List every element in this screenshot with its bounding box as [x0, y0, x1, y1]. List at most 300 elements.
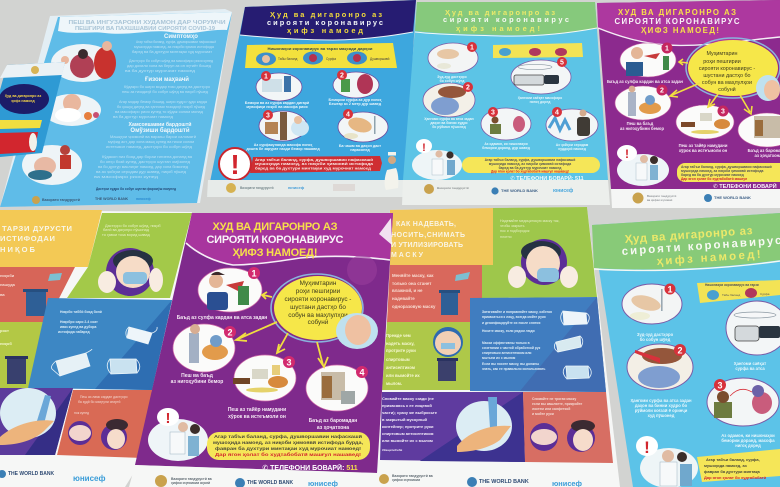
- footer: [207, 180, 404, 197]
- step 3: [233, 355, 296, 401]
- yellow symptoms band: Табы баланд: [278, 57, 297, 61]
- step 3: [676, 105, 734, 139]
- step 3: 3: [717, 380, 723, 390]
- red warning bar: мушоҳида намоед, аз ниқоби ҳимоявӣ истифода: [255, 162, 374, 166]
- captions: даҳон ва бинии худро: [430, 121, 468, 125]
- captions: [607, 79, 780, 158]
- panel: red washing: пок кунед: [74, 411, 89, 415]
- captions: [630, 332, 775, 448]
- icon: person fitting mask: [508, 239, 578, 288]
- illustration: doctor and patient: [148, 408, 208, 461]
- step 3: [707, 378, 779, 426]
- captions: Баъд аз сулфа кардан ва атса задан: [607, 79, 683, 84]
- panel: green wearing mask: Дастҳоро бо собун шӯед, ниқоб: [105, 224, 161, 228]
- illustration: baby feeding: [43, 94, 101, 126]
- leaflet title oval: Ҳуд ва дигаронро аз: [5, 94, 41, 98]
- captions row 2: Аз сурфакунанда масофа нигоҳ: [254, 143, 313, 147]
- poster: purple prevention, bottom centre-left: [129, 213, 393, 487]
- captions: худдорӣ намоед: [558, 147, 587, 151]
- footer logos: ва ҳифзи иҷтимоӣ: [647, 198, 673, 202]
- panel: blue mask instructions: Носите маску, если рядом люди: [482, 329, 535, 333]
- body text: бо онҳо бозӣ кунед, дастҳоро шустан омӯзонед: [100, 160, 191, 164]
- footer: [611, 189, 780, 208]
- panel: yellow title: КАК НАДЕВАТЬ,: [396, 221, 456, 228]
- section headings: Симптомҳо: [164, 34, 198, 40]
- captions: сурфа ва атса: [735, 366, 765, 371]
- panel: red washing: локтем или салфеткой: [532, 407, 570, 411]
- panel: purple sanitising hands: спиртовым антисептиком: [382, 431, 433, 436]
- body text: ва аз ҷойҳои серодам дур шавед, ниқоб пӯшед: [96, 170, 187, 174]
- panel: purple sanitising hands: в закрытый мусорный: [382, 417, 428, 422]
- footer logos: Вазорати тандурустӣ ва: [392, 474, 433, 478]
- step 1: [198, 267, 262, 312]
- yellow advisory pill: [462, 157, 600, 174]
- panel: red washing: Пеш аз ламс кардан дастҳоро: [80, 395, 128, 399]
- footer: [129, 465, 377, 487]
- icon: exclamation: !: [230, 149, 240, 180]
- poster: mask guidance, bottom left: [0, 210, 192, 487]
- yellow advisory pill: Агар табъи баланд, сурфа, душворшавии нафаскашӣ: [485, 158, 575, 162]
- section headings: [128, 34, 198, 134]
- panel: purple sanitising hands: [0, 388, 73, 455]
- step 2: [173, 324, 236, 372]
- panel: red disposal: ниқоби: [0, 273, 15, 278]
- body text: дар дохили хона ва берун аз он эҳтиёт бошед: [127, 64, 212, 68]
- step 1: 1: [251, 268, 257, 278]
- panel: lime disposal: мылом.: [386, 381, 402, 386]
- captions row 2: [246, 143, 381, 152]
- yellow symptoms band: Нишонаҳои коронавирус ва тарзи мақсади дарҳои: [268, 47, 373, 51]
- panel: green wearing mask: чтобы закрыть: [500, 224, 525, 228]
- yellow advisory band: Дар ягон ҳолат бо худтабобатӣ: [704, 475, 767, 480]
- captions: худ пӯшонед: [648, 413, 675, 418]
- figure: man in white robe: [385, 152, 398, 190]
- illustration: doctor and patient: [636, 436, 698, 487]
- panel: red disposal: нашуда: [0, 282, 16, 287]
- yellow advisory pill: мушоҳида намоед, аз ниқоби ҳимоявӣ истифода: [489, 162, 571, 166]
- yellow centre message: собун ва маҳлулҳои: [288, 311, 348, 319]
- step 1: [256, 71, 302, 101]
- footer logos: юнисеф: [288, 185, 305, 190]
- step 2: 2: [677, 346, 683, 356]
- captions: Аз одамон, ки нишонаҳои: [721, 433, 775, 438]
- step 2: [615, 84, 671, 120]
- panel: purple sanitising hands: #ЗащитиСебя: [382, 448, 403, 452]
- illustration: family doing exercise: [22, 145, 82, 185]
- panel: purple sanitising hands: части); сразу же выбросьте: [382, 410, 438, 415]
- captions: Аз одамон, ки нишонаҳои: [484, 142, 528, 146]
- panel: red washing: если вы кашляете, прикройте: [532, 402, 582, 406]
- yellow centre message: Муҳимтарин: [300, 280, 337, 287]
- captions: бемории доранд, масофа: [721, 438, 775, 443]
- panel: lime disposal: протрите руки: [386, 348, 416, 353]
- footer logos: THE WORLD BANK: [95, 197, 129, 201]
- footer logos: Вазорати тандурустӣ ва: [171, 477, 212, 481]
- panel: lime disposal: Прежде чем: [386, 333, 411, 338]
- panel: red disposal: одноразовую маску: [392, 304, 436, 309]
- icon: surgical mask 1: [561, 311, 589, 325]
- title: сирояти коронавирус: [267, 18, 383, 27]
- captions row 1: мувофиқи ниқоб ва масофа риоя: [246, 105, 308, 109]
- step 4: 4: [359, 368, 365, 378]
- panel: yellow title: ТАРЗИ ДУРУСТИ: [2, 224, 72, 233]
- panel: red disposal: [0, 267, 75, 322]
- illustration: doctor and patient: !: [166, 410, 170, 427]
- panel: lime disposal: или вымойте их: [386, 373, 420, 378]
- step 1: [622, 284, 682, 324]
- panel: blue mask instructions: Затягивайте и поправляйте маску, избегая: [482, 310, 552, 314]
- captions row 2: Ба чашм ва даҳон даст: [339, 144, 381, 148]
- panel: blue mask instructions: Если вы носите маску, вы должны: [482, 362, 539, 366]
- red warning bar: Агар табъи баланд, сурфа, душворшавии нафаскашӣ: [255, 158, 373, 162]
- footer logos: ҳифзи иҷтимоии аҳолӣ: [171, 481, 210, 485]
- body text: Кӯдакро бо шири модар ғизо диҳед ва дастҳоро: [124, 85, 210, 89]
- step 4: [738, 113, 780, 147]
- title: Ҳуд ва дигаронро аз: [624, 225, 753, 246]
- footer logos: [632, 192, 751, 204]
- step 2: 2: [466, 84, 470, 92]
- yellow advisory pill: баред ва ба духтур мурочиат намоед: [681, 173, 745, 177]
- poster: green header and blue body, bottom right: [592, 213, 780, 487]
- poster heading: [68, 20, 226, 32]
- title: ҲИФЗ НАМОЕД!: [232, 247, 318, 259]
- step 5: 5: [560, 60, 564, 66]
- footer: [402, 180, 610, 205]
- panel: purple sanitising hands: Снимайте маску сзади (не: [382, 396, 435, 401]
- arrows: [236, 292, 328, 367]
- panel: red disposal: надевайте: [392, 296, 415, 301]
- title: ХУД ВА ДИГАРОНРО АЗ: [618, 8, 736, 17]
- caption step 4: Баъд аз баромадан: [309, 417, 357, 424]
- step 2: 2: [227, 328, 233, 338]
- header banner: [240, 0, 416, 40]
- icon: person fitting mask: [98, 248, 163, 296]
- footer logos: Вазорати тандурустӣ: [437, 186, 469, 190]
- panel: lime disposal: [0, 322, 47, 388]
- yellow centre message: сирояти коронавирус -: [285, 296, 351, 303]
- footer logos: [0, 470, 105, 483]
- icon: surgical mask 1: [126, 327, 157, 344]
- captions: нигоҳ доред: [530, 100, 551, 104]
- panel: yellow title: ИСТИФОДАИ: [0, 234, 55, 243]
- body text: Агар табъи баланд, сурфа, душворшавии нафаскашӣ: [136, 40, 216, 44]
- captions: аз нигоҳубини бемор: [620, 126, 664, 131]
- step 3: [259, 110, 309, 141]
- captions: Пеш аз тайёр намудани: [679, 143, 728, 148]
- panel: blue mask instructions: спиртовым антисептиком или: [482, 351, 531, 355]
- panel: red disposal: влажной, и не: [392, 288, 423, 293]
- captions: Ҳангоми саёҳат: [734, 361, 766, 366]
- section headings: Омўзиши бардоштӣ: [130, 127, 190, 134]
- step 4: [306, 365, 368, 411]
- yellow advisory pill: [677, 163, 780, 182]
- panel: blue mask instructions: и дезинфицируйте их после снятия: [482, 321, 540, 325]
- yellow centre message: роҳи пешгирии: [296, 288, 341, 295]
- yellow advisory band: Агар табъи баланд, сурфа,: [706, 457, 760, 462]
- captions: Аз ҷойҳои серодам: [556, 143, 589, 147]
- header: [597, 0, 780, 44]
- step 5: [511, 57, 571, 94]
- yellow advisory pill: баред ва ба духтур мурочиат намоед: [499, 166, 562, 170]
- caption step 4: аз ҳоҷатхона: [317, 425, 349, 431]
- captions: нигоҳ доред: [735, 443, 761, 448]
- captions row 1: Бемори ва аз сурфа кардан дигарӣ: [245, 101, 310, 105]
- captions: бо собун шӯед: [440, 79, 465, 83]
- yellow centre message: собунӣ: [308, 318, 329, 326]
- captions row 2: нарасонед: [350, 148, 370, 152]
- poster: mask guidance in Russian, bottom centre: [375, 207, 620, 487]
- captions: Ҳангоми саёҳат масофаро: [518, 96, 562, 100]
- panel: yellow title: МАСКУ: [391, 252, 424, 259]
- poster heading: ПЕШ ВА ИНГУЗАРОНИ ХУДАМОН ДАР ЧОРУМЧИ: [68, 20, 226, 26]
- panel: red washing: и мойте руки: [532, 412, 554, 416]
- footer logos: Вазорати тандурустӣ: [240, 186, 274, 190]
- panel: red disposal: Меняйте маску, как: [392, 273, 434, 278]
- yellow centre message: роҳи пешгирии: [703, 59, 741, 65]
- panel: green wearing mask: [67, 213, 192, 298]
- yellow centre message: Муҳимтарин: [706, 51, 738, 57]
- header: [592, 213, 780, 269]
- panel: blue mask instructions: прикасаться к лицу, всегда мойте руки: [482, 315, 546, 319]
- poster: prevention tips, blue text sheet top left: [0, 9, 232, 207]
- panel: red washing: Снимайте не трогая маску: [532, 397, 576, 401]
- yellow centre message: шустани дастҳо бо: [703, 73, 751, 79]
- panel: lime disposal: ниқоб: [0, 341, 12, 346]
- panel: red washing: [57, 390, 152, 458]
- yellow advisory pill: Дар ягон ҳолат бо худтабобатӣ машғул нашавед!: [215, 452, 362, 457]
- body text: ва масофаро риоя кунед: [94, 175, 159, 179]
- footer logos: [155, 475, 339, 487]
- step 2: 2: [660, 88, 664, 94]
- title: Ҳуд ва дигаронро аз: [270, 10, 382, 19]
- step 3: [481, 107, 531, 140]
- panel: blue mask types: Ниқобро сари 2-4 соат: [60, 320, 98, 324]
- step 4: [338, 109, 388, 142]
- panel: green wearing mask: плотно: [500, 235, 512, 239]
- footer logos: [226, 183, 355, 193]
- leaflet: small folded flyer: [0, 62, 65, 157]
- body text: бо қошуқ диҳед ва ҳангоми ғизодиҳӣ ниқоб пӯшед: [117, 105, 206, 109]
- icon: washing hands: [756, 75, 780, 101]
- icon: washing hands: [336, 313, 378, 349]
- illustration: doctor and patient: [412, 139, 462, 180]
- captions row 1: [245, 98, 382, 109]
- step 3: 3: [286, 358, 292, 368]
- title: СИРОЯТИ КОРОНАВИРУС: [614, 17, 740, 26]
- panel: red disposal: [387, 265, 482, 322]
- panel: lime disposal: антисептиком: [386, 365, 415, 370]
- title: [614, 8, 740, 35]
- step 1: [428, 42, 478, 73]
- body text: Агар модар бемор бошад, шири худро ҷудо карда: [119, 100, 207, 104]
- title: ХУД ВА ДИГАРОНРО АЗ: [212, 221, 338, 233]
- captions: бемории доранд, дур шавед: [482, 146, 531, 150]
- panel: purple sanitising hands: или вымойте их с мылом: [382, 438, 433, 443]
- illustration: doctor and patient: !: [644, 438, 650, 457]
- body text: Дастҳоро бо собун шӯед ва масофаро риоя кунед: [129, 59, 214, 63]
- panel: yellow title: [390, 208, 493, 265]
- title: ҳифз намоед!: [656, 249, 761, 268]
- icon: surgical mask 2: [554, 336, 583, 352]
- caption step 4: [309, 417, 357, 431]
- footer logos: THE WORLD BANK: [714, 195, 751, 200]
- body text: пеш аз ғизодиҳӣ бо собун шӯед ва ниқоб пӯшед: [122, 90, 209, 94]
- yellow centre message: собунӣ: [718, 87, 736, 93]
- icon: exclamation: [219, 148, 251, 180]
- yellow centre message: [686, 38, 780, 98]
- title: ҳифз намоед: [287, 26, 363, 35]
- red warning bar: [250, 156, 382, 173]
- panel: lime disposal: надеть маску,: [386, 341, 415, 346]
- captions: [424, 75, 589, 151]
- illustration: family with masks: [51, 41, 116, 82]
- title: СИРОЯТИ КОРОНАВИРУС: [206, 234, 344, 246]
- section headings: Ғизои маҳвачӣ: [145, 77, 189, 83]
- panel: blue mask types: истифода набаред: [58, 330, 91, 334]
- step 4: 4: [555, 110, 559, 116]
- panel: green wearing mask: бинӣ ва даҳонро пӯшонад: [103, 228, 150, 232]
- phone line: ✆ ТЕЛЕФОНИ БОВАРӢ: 511: [262, 464, 358, 472]
- title: Ҳуд ва дигаронро аз: [445, 8, 555, 17]
- header: [186, 213, 393, 265]
- yellow advisory pill: Дар ягон ҳолат бо худтабобатӣ машғул: [681, 177, 747, 181]
- red warning bar: баред ва ба духтури минтақаи худ мурочиат намоед: [255, 166, 372, 170]
- footer logos: юнисеф: [73, 474, 105, 483]
- footer logos: ҳифзи иҷтимоии: [392, 478, 420, 482]
- yellow advisory pill: Дар ягон ҳолат бо худтабобатӣ машғул нашавед!: [491, 170, 569, 174]
- panel: lime disposal: [382, 322, 470, 390]
- step 3: 3: [721, 108, 725, 116]
- yellow symptoms band: [493, 43, 583, 58]
- captions row 1: Бемории сурфа аз дур нигоҳ: [329, 98, 382, 102]
- phone line: ✆ ТЕЛЕФОНИ БОВАРӢ: [713, 183, 777, 190]
- panel: green wearing mask: то ҳавои тоза ворид шавад: [102, 233, 151, 237]
- yellow advisory pill: Агар табъи баланд, сурфа, душворшавии нафаскашӣ: [681, 165, 772, 169]
- footer logos: THE WORLD BANK: [501, 188, 538, 193]
- captions: Зуд-зуд дастҳоро: [437, 75, 467, 79]
- title: сирояти коронавирус: [443, 15, 569, 24]
- body text: ва ба духтур мурочиат намоед: [113, 115, 174, 119]
- yellow advisory pill: [207, 432, 370, 460]
- caption step 2: Пеш ва баъд: [181, 372, 214, 379]
- panel: red disposal: только она станет: [392, 281, 432, 286]
- panel: yellow title: НОСИТЬ,СНИМАТЬ: [391, 232, 465, 239]
- footer logos: [32, 196, 151, 204]
- step 1: 1: [264, 74, 268, 80]
- caption step 2: [171, 372, 223, 385]
- illustration: doctor and patient: !: [625, 147, 629, 161]
- yellow advisory band: [697, 449, 780, 482]
- panel: blue mask instructions: сочетании с частой обработкой рук: [482, 346, 541, 350]
- illustration: doctor and patient: !: [422, 142, 426, 154]
- step 4: [546, 107, 598, 141]
- title: ҲИФЗ НАМОЕД!: [641, 26, 719, 35]
- poster: green header, top right of centre: [402, 2, 610, 205]
- yellow advisory pill: фавран ба духтури минтақаи худ мурочиат намоед!: [215, 446, 362, 451]
- caption step 3: хӯрок ва истеъмоли он: [228, 414, 286, 420]
- panel: yellow title: И УТИЛИЗИРОВАТЬ: [391, 242, 463, 249]
- step 4: 4: [346, 112, 350, 118]
- footer logos: Вазорати тандурустӣ: [42, 198, 80, 202]
- yellow symptoms band: Сурфа: [326, 57, 336, 61]
- illustration: doctor and patient: [617, 145, 669, 186]
- title: [267, 10, 383, 35]
- title: ҳифз намоед!: [456, 24, 540, 33]
- panel: blue mask types: Ниқоби тиббӣ бояд бинӣ: [60, 310, 102, 314]
- step 1: 1: [667, 284, 673, 294]
- captions: рӯймоли коғазӣ ё оринҷи: [635, 408, 688, 413]
- phone line: ✆ ТЕЛЕФОНИ БОВАРӢ: 511: [510, 175, 584, 182]
- caption step 3: [228, 406, 286, 420]
- caption step 1: Баъд аз сулфа кардан ва атса задан: [177, 314, 267, 321]
- body text: ва масофаро риоя кунед то кӯдак солим монад: [115, 110, 204, 114]
- leaflet title oval: [0, 84, 49, 114]
- footer logos: [379, 474, 583, 487]
- yellow symptoms band: Сурфа: [760, 292, 770, 296]
- footer logos: юнисеф: [136, 197, 151, 201]
- panel: blue mask types: [28, 298, 172, 390]
- icon: surgical mask 3: [563, 366, 591, 379]
- poster: purple, top right: [597, 0, 780, 208]
- title: [206, 221, 344, 259]
- footer logos: THE WORLD BANK: [479, 479, 529, 485]
- panel: purple sanitising hands: [380, 392, 525, 462]
- panel: yellow title: НИҚОБ: [0, 245, 36, 254]
- footer logos: THE WORLD BANK: [247, 480, 293, 486]
- poster heading: ПЕШГИРИ ВА ПАХШШАВИИ СИРОЯТИ COVID-19: [75, 26, 215, 32]
- yellow centre message: [271, 274, 363, 342]
- body text: ва бо духтур маслиҳат намоед, дар хона бимонед: [98, 165, 189, 169]
- plane and train circle: [726, 301, 780, 355]
- captions: хӯрок ва истеъмоли он: [679, 148, 728, 153]
- panel: blue mask instructions: мытьем их с мылом: [482, 356, 516, 360]
- footer logos: [424, 184, 574, 195]
- step 2: 2: [340, 72, 344, 80]
- body text: Машқҳои ҷисмонӣ ва варзиш барои саломатӣ: [110, 135, 196, 139]
- title: [443, 8, 569, 33]
- icon: surgical mask 2: [52, 349, 92, 376]
- body text: Кӯдакон низ бояд дар бораи гигиена донанд ва: [102, 155, 192, 159]
- captions row 1: Бештар аз 2 метр дур шавед: [329, 102, 382, 106]
- step 2: [333, 70, 379, 98]
- panel: red disposal: ва: [0, 292, 5, 297]
- icon: surgical mask 3: [107, 359, 140, 374]
- yellow advisory band: фавран ба духтури минтақа: [704, 469, 761, 474]
- body text: баред ва ба духтури минтақаи худ мурочиат: [132, 50, 212, 54]
- panel: blue mask instructions: знать, как ее правильно использовать: [482, 367, 545, 371]
- caption step 2: аз нигоҳубини бемор: [171, 378, 223, 385]
- footer logos: юнисеф: [553, 187, 574, 194]
- panel: yellow title: [0, 210, 102, 267]
- captions: бо рӯймол пӯшонед: [432, 125, 467, 129]
- closing line: Дастҳои худро бо собун шустан фаромӯш накунед: [96, 186, 176, 191]
- captions: Зуд-зуд дастҳоро: [637, 332, 674, 337]
- panel: blue mask instructions: [470, 297, 606, 392]
- captions: Ҳангоми сурфа ва атса задан: [424, 117, 474, 121]
- step 3: 3: [266, 112, 270, 120]
- body text: муфид аст, дар хона машқ кунед ва ғизои солим: [108, 140, 195, 144]
- step 1: 1: [470, 44, 474, 52]
- captions: Ҳангоми сурфа ва атса задан: [630, 398, 692, 403]
- footer logos: THE WORLD BANK: [8, 471, 54, 477]
- panel: green wearing mask: Надевайте медицинскую маску так,: [500, 219, 559, 223]
- yellow centre message: шустани дастҳо бо: [290, 303, 346, 311]
- panel: purple sanitising hands: контейнер; протрите руки: [382, 424, 434, 429]
- poster: navy header top centre: [207, 0, 416, 197]
- yellow advisory pill: мушоҳида намоед, аз ниқоби ҳимоявӣ истифода: [681, 169, 764, 173]
- panel: green wearing mask: нос и подбородок: [500, 229, 530, 233]
- body text: мушоҳида намоед, аз ниқоби ҳимоя истифода: [134, 45, 214, 49]
